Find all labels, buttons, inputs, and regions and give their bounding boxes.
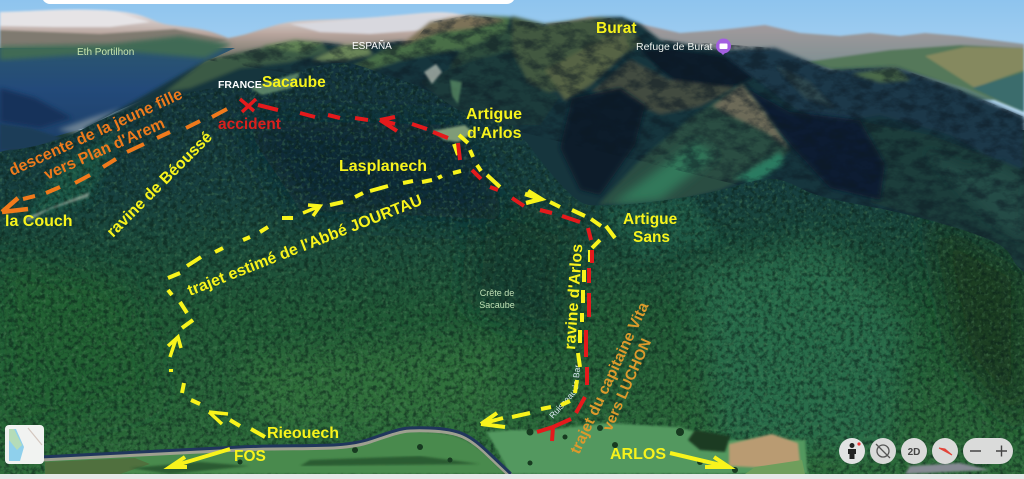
- main mountain ridge: [85, 15, 1024, 300]
- name: trajet estimé de l'Abbé JOURTAU: trajet estimé de l'Abbé JOURTAU: [185, 192, 425, 300]
- label: vers LUCHON: vers LUCHON: [599, 336, 655, 434]
- label: FRANCE: FRANCE: [218, 79, 262, 91]
- yellow route: Abbé Jourtau: [168, 135, 615, 437]
- valley meadows: [45, 423, 990, 474]
- control: zoom: [963, 438, 1013, 464]
- ridge mottling: [208, 15, 1024, 270]
- accident label: accident: [218, 116, 281, 133]
- label: vers Plan d'Arem: vers Plan d'Arem: [42, 115, 167, 184]
- bottom strip: [0, 474, 1024, 479]
- name: Burat: Burat: [596, 20, 636, 37]
- yellow arrow to ARLOS: [670, 453, 729, 467]
- search bar at top: [42, 0, 515, 4]
- green gully: [450, 80, 462, 104]
- name: Artigue Sans: Artigue: [623, 211, 677, 228]
- label: Refuge de Burat: Refuge de Burat: [636, 41, 713, 53]
- name: Artigue Sans: Sans: [633, 229, 670, 246]
- label: Eth Portilhon: Eth Portilhon: [77, 47, 134, 58]
- minimap thumbnail: [5, 425, 44, 464]
- label: de Barrat: de Bar: [570, 364, 582, 390]
- name: Lasplanech: Lasplanech: [339, 158, 427, 175]
- label: Crête de Sacaube: Crête de: [480, 288, 514, 298]
- far snowy mountains left: [0, 10, 480, 70]
- left valley in blue haze: [0, 36, 235, 152]
- orange route: young girl's descent: [2, 109, 227, 212]
- label: trajet du capitaine Vita: trajet du capitaine Vita: [567, 300, 653, 457]
- name: ravine de Béoussé: ravine de Béoussé: [104, 129, 216, 241]
- name: FOS: FOS: [234, 448, 266, 465]
- scree patch: [424, 64, 442, 84]
- name: la Couch: la Couch: [5, 213, 73, 230]
- name: Rieouech: Rieouech: [267, 425, 339, 442]
- control: 2D: 2D: [908, 447, 920, 458]
- map controls: [839, 438, 1013, 464]
- pale scree near la Couch: [25, 192, 90, 222]
- name: ARLOS: ARLOS: [610, 446, 666, 463]
- name: Sacaube: Sacaube: [262, 74, 326, 91]
- sky: [0, 0, 1024, 130]
- control: 2D: [901, 438, 927, 464]
- control: compass needle: [932, 438, 958, 464]
- river Garonne: [40, 428, 510, 475]
- label: Ruisseau: Ruisseau: [547, 387, 578, 420]
- orange route labels: [7, 86, 185, 184]
- clearing at Sacaube: [250, 72, 300, 95]
- place names in yellow: [5, 20, 678, 465]
- route labels to Luchon: [567, 300, 655, 457]
- clearing at Artigue d'Arlos: [432, 125, 473, 142]
- icon: refuge pin: [716, 38, 731, 55]
- far mountains right: [545, 17, 1024, 112]
- name: Artigue d'Arlos: Artigue: [466, 106, 522, 123]
- control: street view: [839, 438, 865, 464]
- yellow arrow to FOS: [170, 449, 230, 467]
- shaded gullies and green ridges: [560, 84, 1024, 240]
- control: compass off: [870, 438, 896, 464]
- red route: Captain Vita: [240, 99, 592, 441]
- label: Crête de Sacaube: Sacaube: [479, 300, 515, 310]
- map labels: [77, 39, 713, 420]
- name: Artigue d'Arlos: d'Arlos: [467, 125, 522, 142]
- label: descente de la jeune fille: descente de la jeune fille: [7, 86, 185, 180]
- name: ravine d'Arlos: ravine d'Arlos: [562, 243, 586, 350]
- label: ESPAÑA: ESPAÑA: [352, 39, 392, 52]
